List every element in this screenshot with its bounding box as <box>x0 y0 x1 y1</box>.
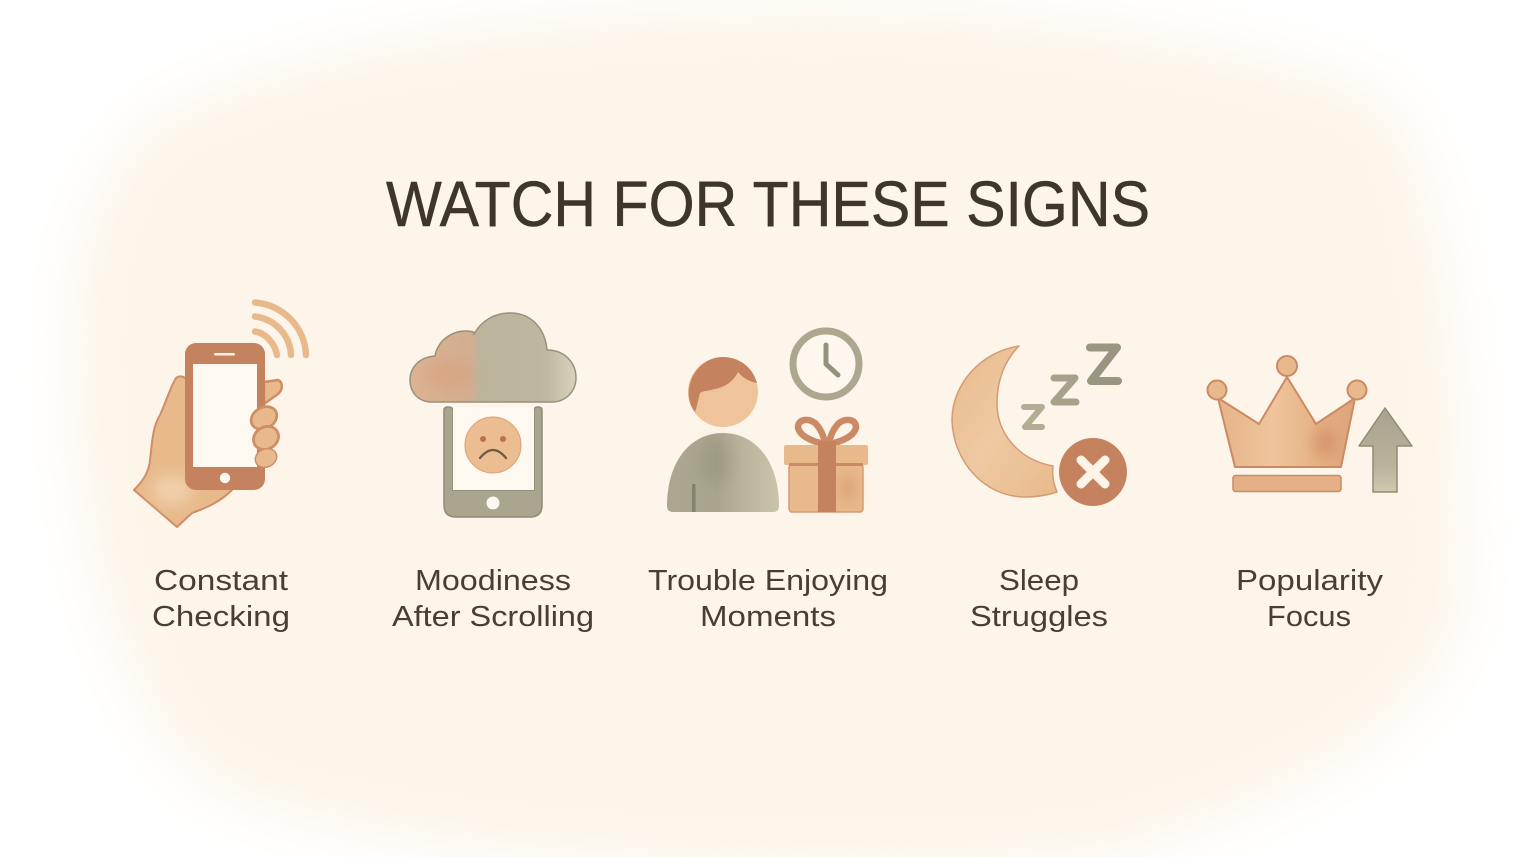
label: sleep struggles: Struggles <box>970 601 1108 633</box>
icon: crown and up arrow <box>1208 356 1412 492</box>
x badge <box>1059 438 1127 506</box>
moon <box>952 346 1057 497</box>
sign: sleep struggles <box>952 346 1127 633</box>
body shade <box>701 440 731 484</box>
crown blot <box>1313 427 1337 457</box>
label: moodiness after scrolling: After Scrolling <box>392 601 594 633</box>
crown base <box>1233 476 1341 492</box>
icon: person, clock and gift <box>667 331 868 512</box>
sad face <box>465 417 521 473</box>
hand <box>134 376 232 527</box>
person head <box>688 357 758 427</box>
crown <box>1218 377 1355 467</box>
icon: hand holding phone with signal waves <box>134 302 306 527</box>
hand highlight <box>152 475 192 505</box>
label: constant checking: Checking <box>152 601 290 633</box>
phone speaker <box>214 353 235 356</box>
sign: popularity focus <box>1208 356 1412 633</box>
phone home button <box>220 473 230 483</box>
label: moodiness after scrolling: Moodiness <box>415 565 571 597</box>
fingers <box>247 402 283 471</box>
cloud orange blot <box>426 360 474 390</box>
gift <box>784 420 868 512</box>
label: trouble enjoying moments: Trouble Enjoying <box>648 565 888 597</box>
arm line <box>692 484 696 512</box>
icon: moon, z letters and x badge <box>952 346 1127 506</box>
clock <box>793 331 859 397</box>
person hair <box>689 357 757 412</box>
label: trouble enjoying moments: Moments <box>700 601 836 633</box>
sign: moodiness after scrolling <box>392 313 594 633</box>
cloud <box>410 313 576 402</box>
label: trouble enjoying moments <box>648 565 888 633</box>
label: popularity focus <box>1236 565 1384 633</box>
phone screen <box>193 364 257 467</box>
signal waves <box>255 302 306 355</box>
sign: constant checking <box>134 302 306 633</box>
label: constant checking: Constant <box>154 565 288 597</box>
phone frame <box>444 407 542 517</box>
icon: storm cloud over phone with sad face <box>410 313 576 517</box>
top finger <box>264 380 282 404</box>
label: constant checking <box>152 565 290 633</box>
phone body <box>185 343 265 490</box>
label: moodiness after scrolling <box>392 565 594 633</box>
label: sleep struggles <box>970 565 1108 633</box>
phone home button <box>486 496 500 510</box>
title: WATCH FOR THESE SIGNS <box>386 168 1150 240</box>
crown balls <box>1208 356 1366 400</box>
up arrow <box>1359 408 1412 492</box>
gift bow <box>798 420 856 444</box>
label: popularity focus: Popularity <box>1236 565 1384 597</box>
z letters <box>1024 348 1118 427</box>
sign: trouble enjoying moments <box>648 331 888 633</box>
phone screen <box>453 407 534 490</box>
label: sleep struggles: Sleep <box>999 565 1079 597</box>
label: popularity focus: Focus <box>1267 601 1351 633</box>
person body <box>667 433 779 512</box>
